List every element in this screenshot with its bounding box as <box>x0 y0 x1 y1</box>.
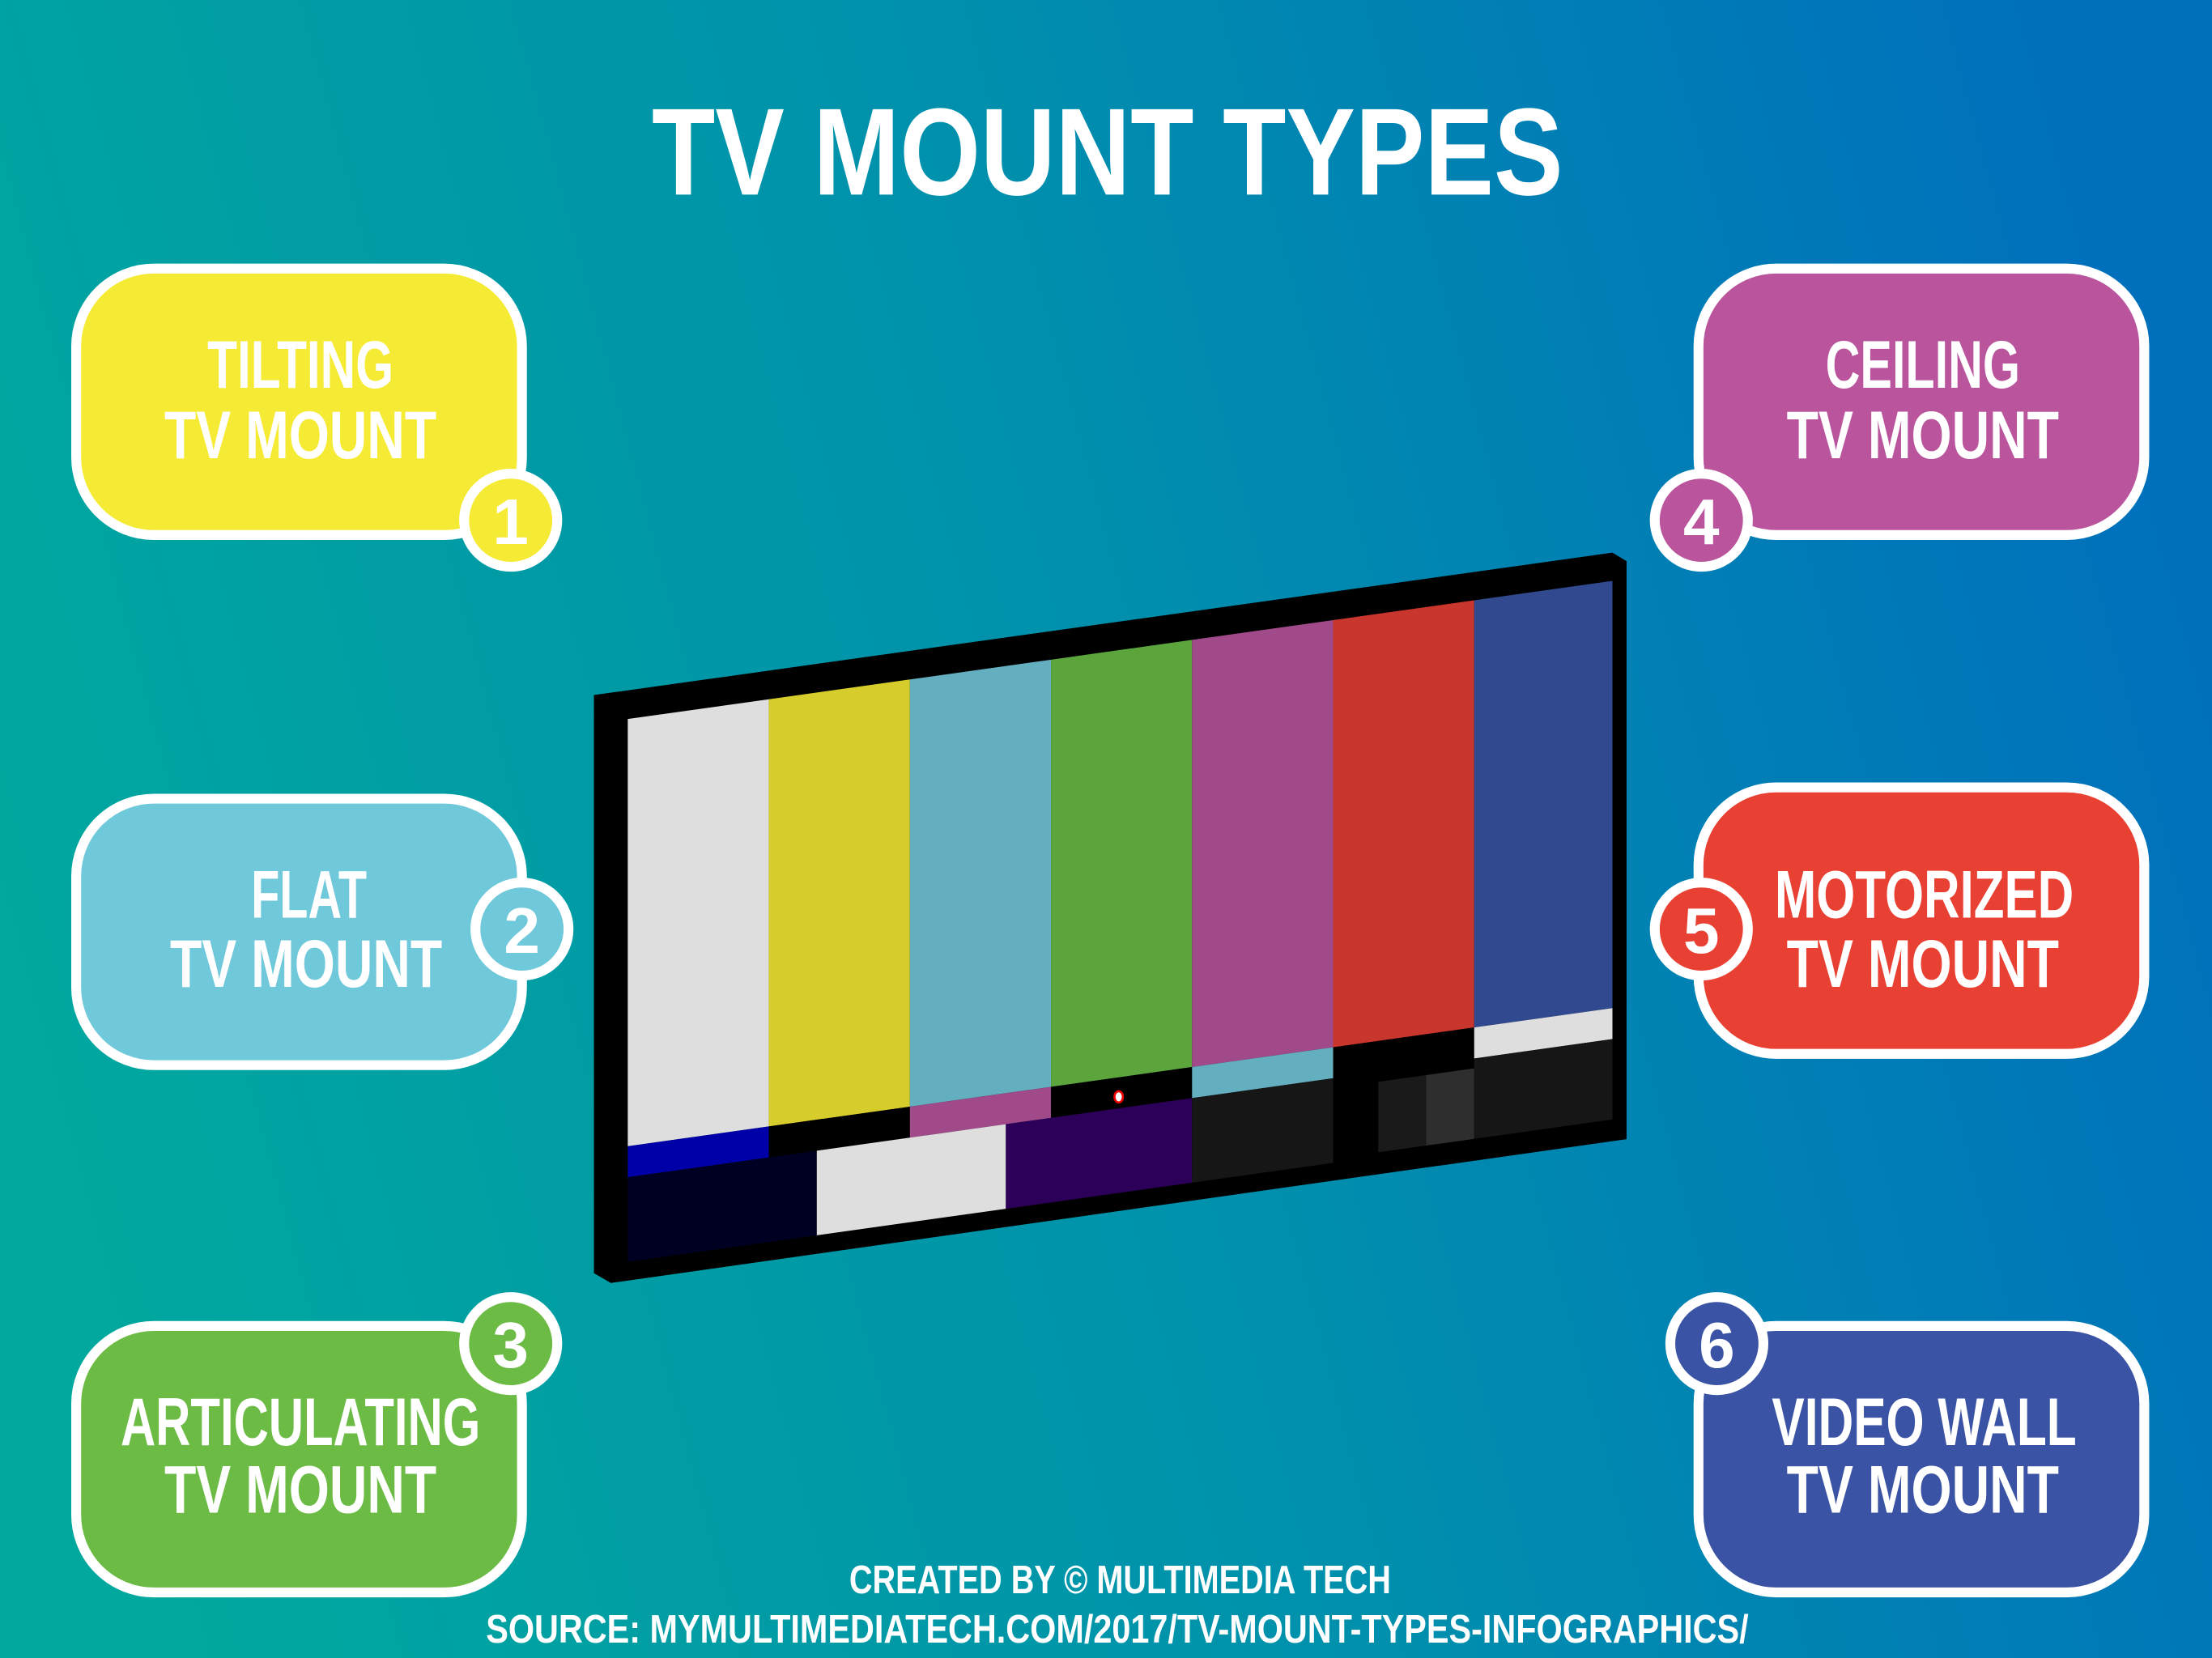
badge 2 <box>475 882 568 976</box>
panel: flat tv mount: FLAT <box>251 857 367 933</box>
panel: ceiling tv mount: TV MOUNT <box>1787 397 2059 473</box>
panel: motorized tv mount <box>1655 788 2144 1054</box>
panel: articulating tv mount <box>76 1297 557 1592</box>
panel: tilting tv mount <box>76 269 557 567</box>
panel: video wall tv mount: TV MOUNT <box>1787 1452 2059 1528</box>
badge 5 <box>1655 882 1748 976</box>
panel: articulating tv mount: ARTICULATING <box>121 1384 480 1460</box>
panel: video wall tv mount: VIDEO WALL <box>1772 1384 2077 1460</box>
panel: motorized tv mount: MOTORIZED <box>1775 857 2074 933</box>
panel: motorized tv mount: TV MOUNT <box>1787 925 2059 1001</box>
footer credit: CREATED BY © MULTIMEDIA TECH <box>849 1558 1391 1602</box>
footer credit <box>486 1558 1749 1652</box>
badge 4: 4 <box>1683 485 1720 558</box>
badge 1 <box>464 474 557 567</box>
tv screen color bars <box>627 581 1613 1262</box>
badge 6 <box>1670 1297 1763 1390</box>
panel: tilting tv mount: TV MOUNT <box>164 397 436 473</box>
panel: articulating tv mount: TV MOUNT <box>164 1452 436 1528</box>
footer credit: SOURCE: MYMULTIMEDIATECH.COM/2017/TV-MOUNT-TYPES-INFOGRAPHICS/ <box>486 1608 1749 1652</box>
red dot <box>1114 1091 1123 1103</box>
panel: tilting tv mount: TILTING <box>207 326 393 402</box>
badge 5: 5 <box>1683 894 1720 967</box>
tv frame <box>594 553 1627 1283</box>
badge 2: 2 <box>504 894 540 967</box>
panel: video wall tv mount <box>1670 1297 2144 1592</box>
badge 1: 1 <box>492 485 529 558</box>
panel: flat tv mount: TV MOUNT <box>170 925 442 1001</box>
panel: ceiling tv mount <box>1655 269 2144 567</box>
panel: ceiling tv mount: CEILING <box>1826 326 2020 402</box>
tv illustration <box>594 553 1627 1283</box>
badge 6: 6 <box>1699 1308 1735 1381</box>
badge 3 <box>464 1297 557 1390</box>
panel: flat tv mount <box>76 799 568 1065</box>
title: TV MOUNT TYPES <box>652 83 1563 221</box>
badge 4 <box>1655 474 1748 567</box>
badge 3: 3 <box>492 1308 529 1381</box>
